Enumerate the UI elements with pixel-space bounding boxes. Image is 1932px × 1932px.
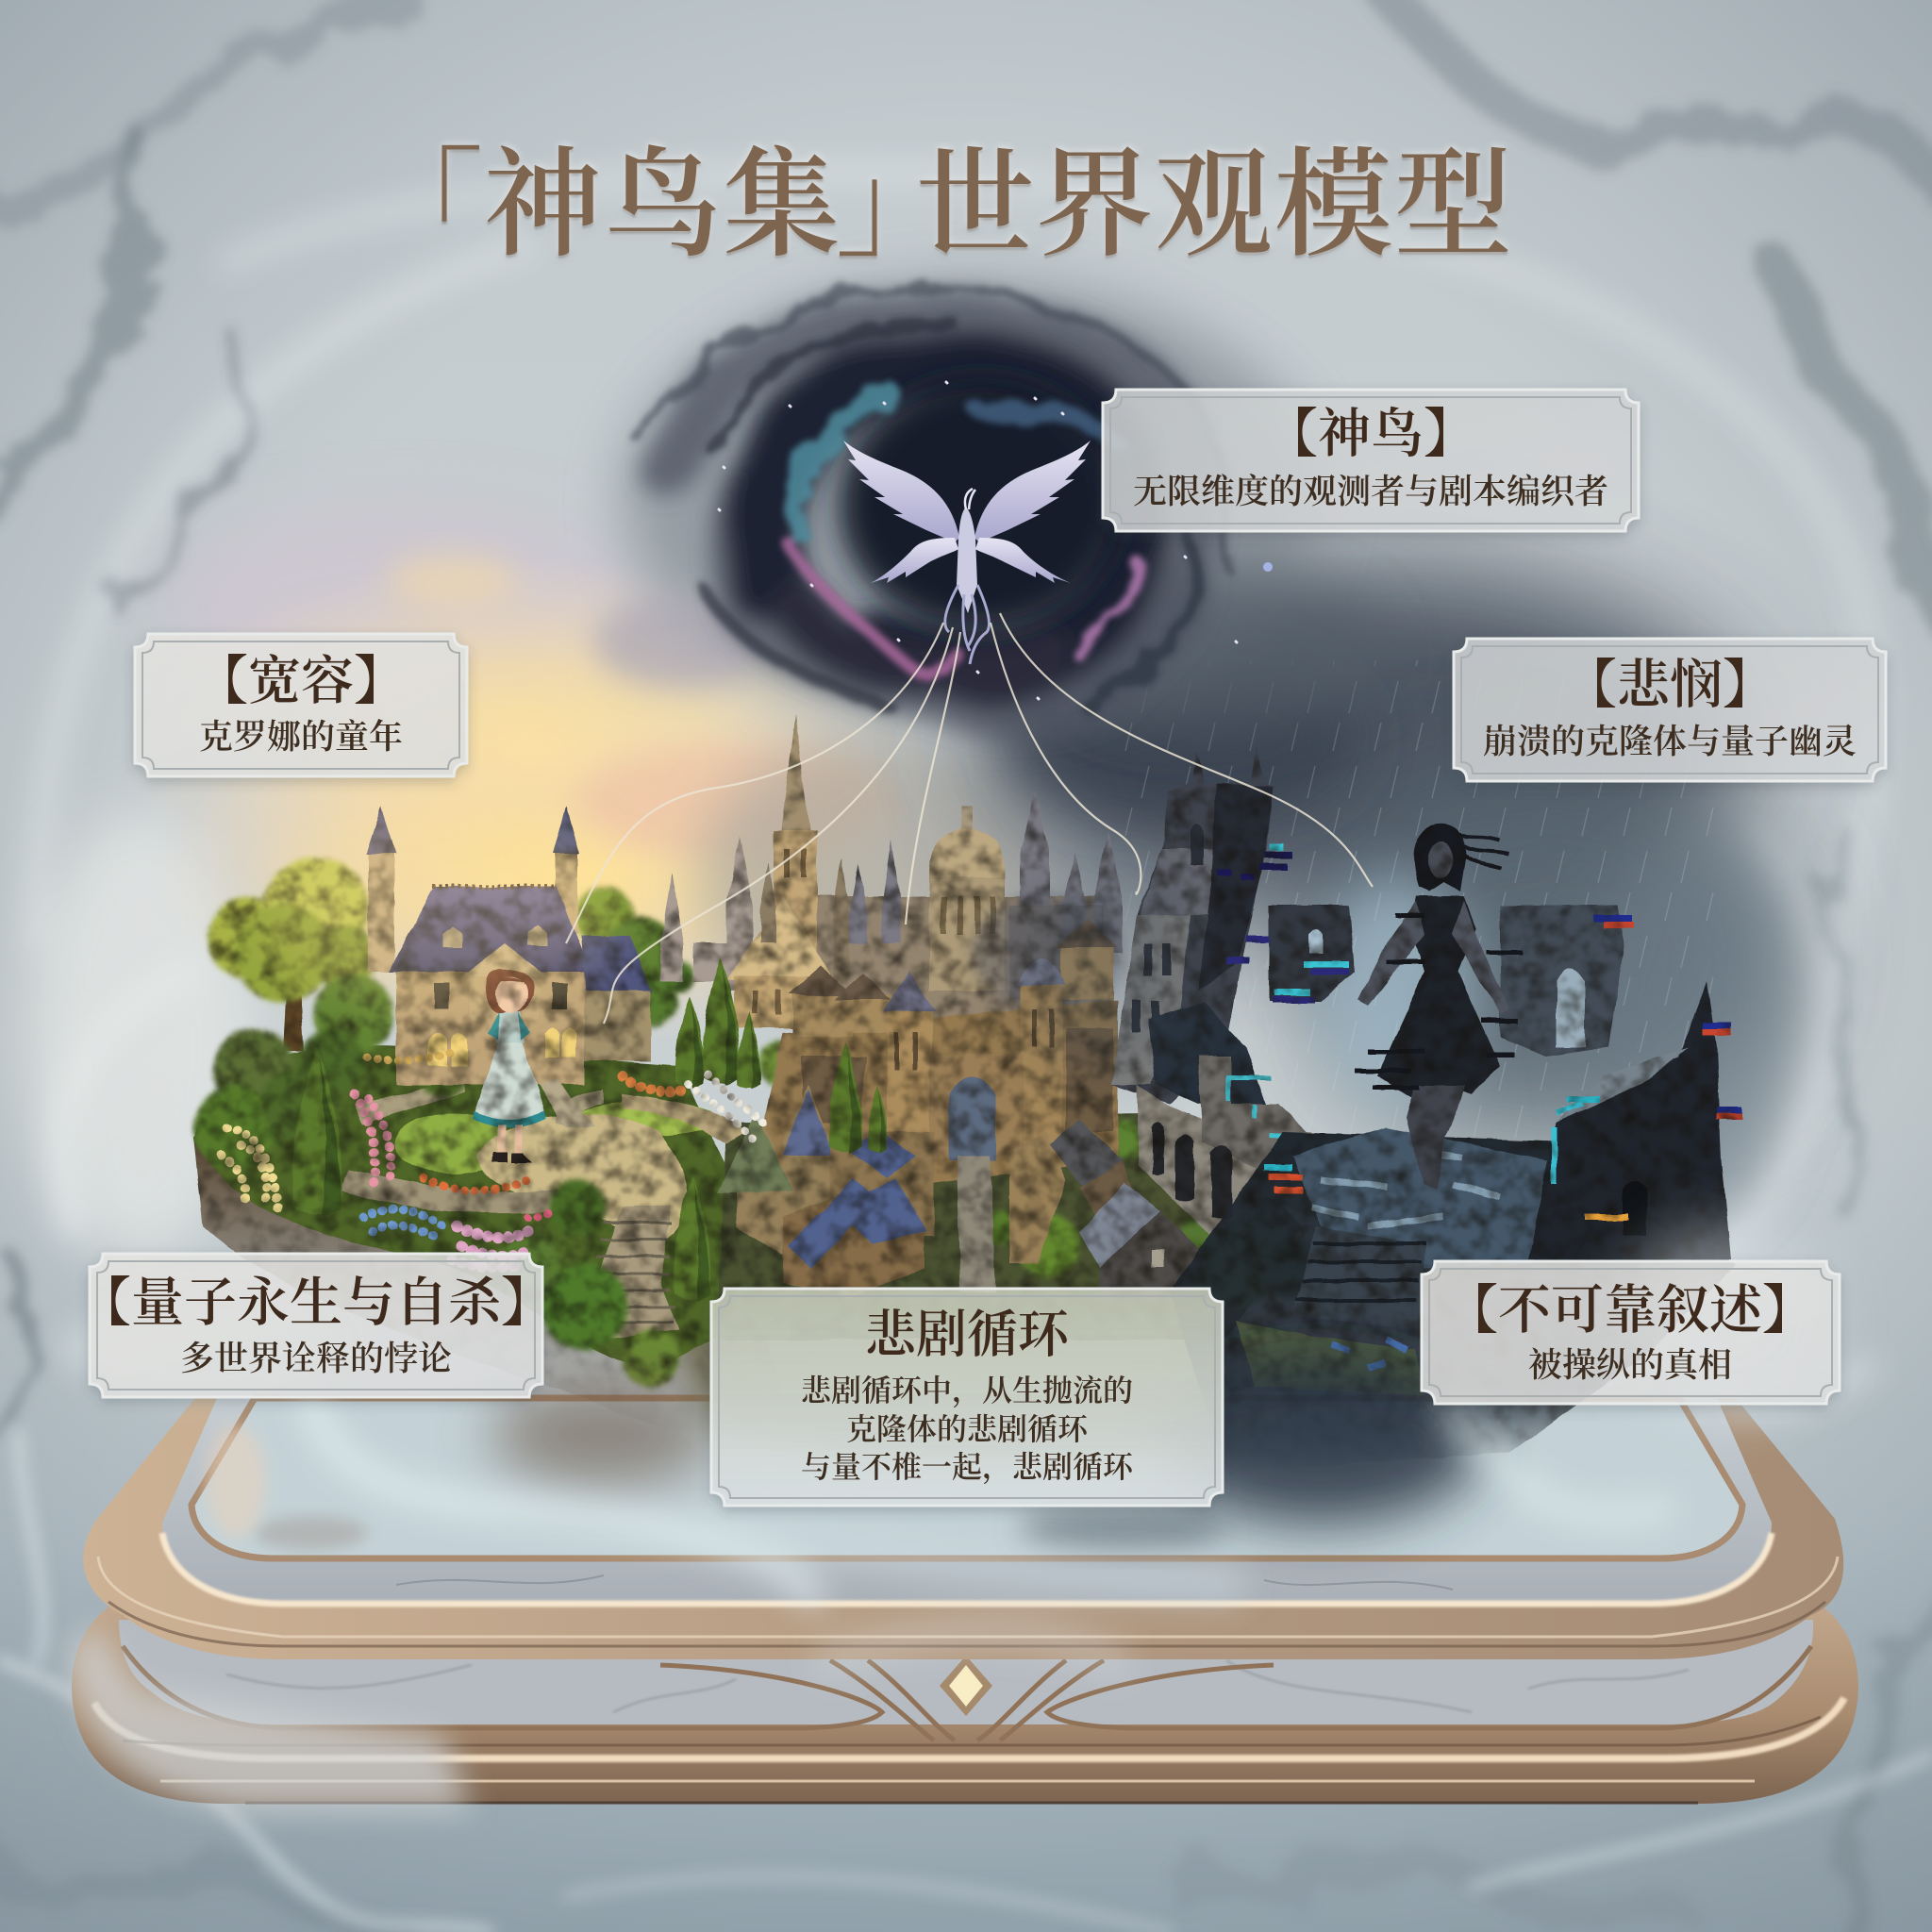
icon: phoenix	[843, 441, 1091, 664]
panel: 宽容	[135, 634, 467, 776]
base: lower tier	[72, 1604, 1858, 1804]
atmospheric light over the scene	[264, 802, 1198, 1075]
heading: 悲剧循环	[865, 1307, 1072, 1363]
panel: 悲悯	[1454, 639, 1886, 781]
island shadows over the pedestal	[491, 1363, 1481, 1551]
subtitle: 多世界诠释的悖论	[180, 1340, 452, 1377]
icon: base diamond	[940, 1656, 992, 1716]
mist wisps	[57, 1226, 1868, 1811]
town walls and gate	[745, 919, 1118, 1292]
glitch fragments	[1217, 847, 1741, 1217]
body text: 悲剧循环中，从生抛流的	[801, 1374, 1133, 1407]
girl figure	[473, 970, 547, 1162]
subtitle: 克罗娜的童年	[199, 718, 403, 756]
cosmic vortex	[594, 283, 1387, 726]
distant city	[660, 789, 1123, 1028]
ghost girl figure	[1355, 824, 1524, 1191]
flowers	[222, 1052, 764, 1268]
body text: 克隆体的悲剧循环	[846, 1412, 1090, 1446]
cliff ruin	[1528, 981, 1731, 1259]
far arch ruin	[1500, 906, 1624, 1057]
rainy ground and stairs	[1170, 1127, 1736, 1472]
mansion	[366, 807, 653, 1127]
golden threads from the phoenix	[566, 613, 1373, 1024]
trees and shrubs	[194, 858, 1324, 1387]
title: 「神鸟集」世界观模型	[365, 142, 1512, 272]
sky glow: sunrise on the left	[123, 500, 1057, 1047]
illustrated floating island scene	[193, 714, 1741, 1472]
ruined tower	[1111, 745, 1355, 1104]
island: garden terrain	[193, 1045, 1302, 1433]
island shadow behind the central panel	[660, 1321, 1264, 1460]
panel: 神鸟	[1103, 390, 1639, 531]
heading: 【不可靠叙述】	[1445, 1282, 1815, 1341]
panel: 量子永生与自杀	[78, 1254, 554, 1397]
heading: 【神鸟】	[1265, 406, 1476, 464]
cypress trees	[291, 958, 888, 1302]
panel: 不可靠叙述	[1422, 1261, 1840, 1404]
panel: 悲剧循环	[711, 1289, 1223, 1506]
heading: 【宽容】	[195, 653, 407, 711]
subtitle: 崩溃的克隆体与量子幽灵	[1483, 723, 1857, 760]
subtitle: 无限维度的观测者与剧本编织者	[1133, 473, 1608, 510]
heading: 【量子永生与自杀】	[78, 1274, 554, 1333]
heading: 【悲悯】	[1564, 657, 1775, 715]
cathedral	[726, 714, 849, 1028]
lower town houses	[717, 1085, 1203, 1302]
base: upper tier	[83, 1398, 1843, 1659]
storm clouds on the right	[991, 566, 1792, 1264]
subtitle: 被操纵的真相	[1528, 1346, 1732, 1384]
colosseum ruin	[1137, 1003, 1311, 1236]
body text: 与量不椎一起，悲剧循环	[801, 1450, 1135, 1485]
